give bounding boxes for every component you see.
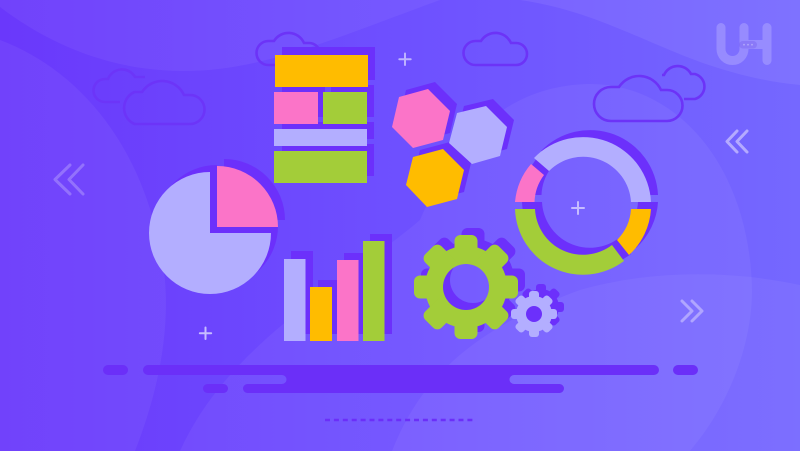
hexagon: yellow [406, 149, 464, 207]
cloud: top centre [464, 33, 527, 65]
small gear [511, 291, 557, 337]
gears [414, 228, 564, 339]
pie shadow [156, 159, 285, 287]
donut: yellow segment [617, 209, 651, 255]
bar shadows [291, 234, 392, 334]
hexagon: lavender [449, 106, 507, 164]
cloud: top left behind panels [256, 33, 320, 65]
plus: bottom left [200, 328, 211, 339]
panel: layout blocks [274, 47, 375, 183]
blocks shadow [282, 47, 375, 176]
plus: donut centre [572, 202, 584, 214]
hexagon: pink [392, 89, 450, 148]
block: green footer [274, 151, 367, 183]
bar: green [363, 241, 384, 341]
pie: lavender slice [149, 172, 271, 294]
ground bars [103, 365, 698, 393]
block: lavender [274, 129, 367, 146]
donut: green segment [515, 209, 624, 275]
cloud: right small [662, 66, 704, 99]
big gear shadow [421, 228, 525, 332]
small gear shadow [518, 284, 564, 330]
logo: UH [721, 28, 767, 60]
bar: pink [337, 260, 358, 341]
block: yellow header [275, 55, 368, 87]
chevrons: left [55, 165, 83, 194]
cloud: right large [594, 76, 682, 121]
donut: lavender segment [534, 137, 651, 202]
hexagon shadows [399, 82, 514, 200]
clouds [94, 33, 704, 124]
bar chart [284, 234, 392, 341]
block: pink [274, 92, 318, 124]
cloud: far left small [94, 69, 145, 102]
pie: pink slice [217, 166, 278, 227]
big gear [414, 235, 518, 339]
dashed ground line [325, 419, 473, 421]
pie chart [149, 159, 285, 294]
block: green [323, 92, 367, 124]
donut chart [515, 130, 658, 275]
hexagons [392, 82, 514, 207]
chevrons: lower right [682, 301, 702, 321]
donut: pink segment [515, 164, 544, 202]
plus: top [399, 54, 411, 65]
cloud: left large [124, 81, 204, 124]
bar: lavender [284, 259, 306, 341]
donut shadow [522, 130, 658, 268]
chevrons: upper right [727, 131, 747, 152]
bar: yellow [310, 287, 332, 341]
